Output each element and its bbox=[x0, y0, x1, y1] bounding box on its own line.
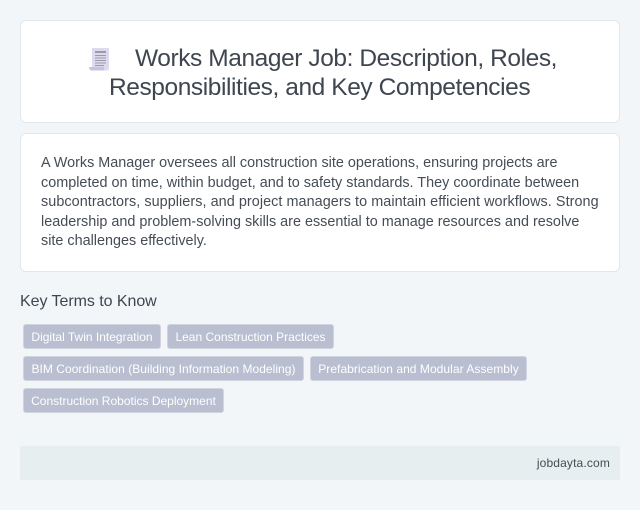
title: Responsibilities, and Key Competencies bbox=[109, 74, 530, 101]
title: Works Manager Job: Description, Roles, bbox=[135, 45, 557, 72]
tag: digital twin: Digital Twin Integration bbox=[31, 330, 153, 344]
tag list bbox=[23, 324, 527, 413]
footer source text: jobdayta.com bbox=[537, 456, 610, 470]
tag: digital twin bbox=[23, 324, 161, 349]
description text: leadership and problem-solving skills are essential to manage resources and resolve bbox=[41, 214, 579, 230]
heading: key terms: Key Terms to Know bbox=[20, 293, 157, 310]
panel: description card bbox=[20, 133, 620, 272]
description text bbox=[41, 155, 599, 249]
tag: lean construction bbox=[167, 324, 334, 349]
panel: title card bbox=[20, 20, 620, 123]
description text: completed on time, within budget, and to safety standards. They coordinate between bbox=[41, 174, 579, 190]
tag: BIM bbox=[23, 356, 304, 381]
tag: BIM: BIM Coordination (Building Information Modeling) bbox=[31, 362, 296, 376]
tag: prefabrication bbox=[310, 356, 527, 381]
description text: site challenges effectively. bbox=[41, 233, 207, 249]
title bbox=[109, 45, 557, 101]
tag: robotics: Construction Robotics Deployment bbox=[31, 394, 216, 408]
footer bar bbox=[20, 446, 620, 480]
tag: lean construction: Lean Construction Practices bbox=[175, 330, 326, 344]
icon: document bbox=[89, 48, 109, 70]
tag: prefabrication: Prefabrication and Modular Assembly bbox=[318, 362, 519, 376]
description text: A Works Manager oversees all construction site operations, ensuring projects are bbox=[41, 155, 557, 171]
tag: robotics bbox=[23, 388, 224, 413]
description text: subcontractors, suppliers, and project managers to maintain efficient workflows. Strong bbox=[41, 194, 599, 210]
